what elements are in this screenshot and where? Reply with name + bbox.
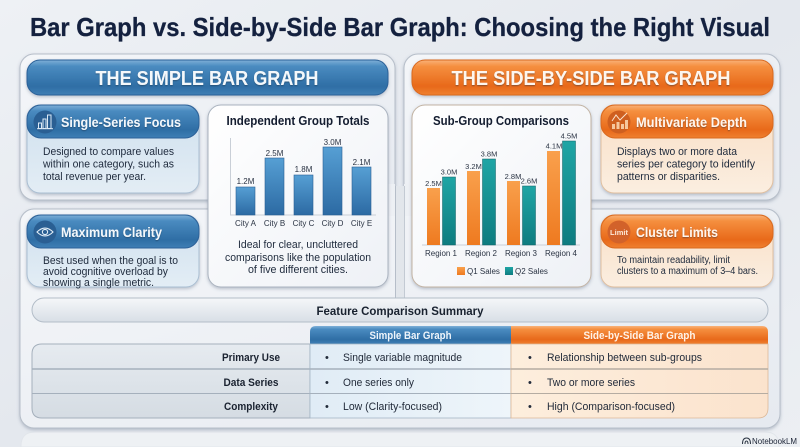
- legend: [457, 267, 548, 276]
- table row labels: Data Series: [224, 377, 278, 389]
- heading: maximum clarity: Maximum Clarity: [61, 225, 162, 240]
- table header: simple bar graph: Simple Bar Graph: [370, 330, 452, 342]
- bar chart: city populations: City C: [293, 219, 315, 228]
- table row labels: Complexity: [224, 401, 279, 413]
- card: sub-group comparisons chart: [412, 105, 591, 287]
- table row labels: Primary Use: [222, 352, 280, 364]
- text: cluster limits description: To maintain readability, limit: [617, 255, 730, 266]
- table column: simple bar graph: Single variable magnitude: [343, 352, 462, 364]
- bar chart: regional sales: 3.0M: [441, 168, 457, 176]
- icon: bar chart: [34, 110, 56, 134]
- bar chart: regional sales: Region 3: [505, 249, 538, 258]
- panel: side-by-side bar graph top: [404, 54, 780, 200]
- table row labels: [32, 344, 310, 418]
- text: cluster limits description: clusters to a maximum of 3–4 bars.: [617, 266, 758, 277]
- table header: side-by-side bar graph: [511, 326, 768, 344]
- bar chart: city populations: City A: [235, 219, 257, 228]
- text: maximum clarity description: avoid cognitive overload by: [43, 266, 168, 278]
- card: single-series focus: [27, 105, 199, 193]
- legend: Q2 Sales: [515, 267, 548, 276]
- icon: limit badge: Limit: [610, 228, 628, 237]
- heading: single-series focus: Single-Series Focus: [61, 115, 181, 130]
- bar chart: regional sales: Region 4: [545, 249, 578, 258]
- heading: independent group totals: Independent Group Totals: [226, 114, 370, 128]
- heading: sub-group comparisons: Sub-Group Comparisons: [433, 114, 569, 128]
- heading: cluster limits: Cluster Limits: [636, 225, 718, 240]
- text: multivariate description: Displays two or more data: [617, 146, 738, 158]
- table column: side-by-side bar graph: •: [528, 352, 532, 364]
- card: multivariate depth: [601, 105, 773, 193]
- bar chart: city populations: 1.2M: [237, 177, 255, 186]
- table column: side-by-side bar graph: Two or more series: [547, 377, 635, 389]
- table column: simple bar graph: •: [325, 401, 329, 413]
- heading: multivariate depth: Multivariate Depth: [636, 115, 747, 130]
- text: chart caption: Ideal for clear, uncluttered: [238, 239, 358, 251]
- heading: feature comparison summary: Feature Comparison Summary: [316, 304, 484, 318]
- gutter between columns: [385, 184, 413, 298]
- card header: multivariate depth: [601, 105, 773, 138]
- table column: side-by-side bar graph: Relationship between sub-groups: [547, 352, 702, 364]
- bar chart: regional sales: [422, 132, 580, 258]
- bar chart: regional sales: Region 2: [465, 249, 498, 258]
- table header: simple bar graph: [310, 326, 511, 344]
- table column: side-by-side bar graph: [511, 344, 768, 418]
- text: single-series description: within one category, such as: [42, 158, 174, 170]
- text: chart caption: of five different cities.: [248, 264, 348, 276]
- bar chart: city populations: City D: [322, 219, 344, 228]
- bar chart: city populations: 3.0M: [324, 138, 342, 147]
- bar chart: city populations: City B: [264, 219, 285, 228]
- bar chart: city populations: 1.8M: [295, 165, 313, 174]
- bar chart: city populations: City E: [351, 219, 372, 228]
- card header: cluster limits: [601, 215, 773, 248]
- icon: eye: [34, 220, 56, 244]
- text: multivariate description: patterns or disparities.: [617, 171, 720, 183]
- bar chart: regional sales: 4.1M: [546, 142, 562, 150]
- panel: simple bar graph top: [20, 54, 395, 200]
- banner: the simple bar graph: [27, 60, 388, 95]
- bar chart: regional sales: 4.5M: [561, 132, 577, 140]
- icon: limit badge: [608, 220, 630, 244]
- text: single-series description: total revenue per year.: [43, 171, 146, 183]
- text: maximum clarity description: showing a single metric.: [43, 277, 154, 289]
- card: maximum clarity: [27, 215, 199, 289]
- card: cluster limits: [601, 215, 773, 287]
- table header: side-by-side bar graph: Side-by-Side Bar Graph: [584, 330, 696, 342]
- table column: side-by-side bar graph: •: [528, 401, 532, 413]
- bar chart: city populations: 2.1M: [353, 158, 371, 167]
- table column: side-by-side bar graph: High (Comparison-focused): [547, 401, 675, 413]
- icon: multivariate chart: [608, 110, 630, 134]
- text: single-series description: Designed to compare values: [43, 146, 174, 158]
- table column: simple bar graph: •: [325, 352, 329, 364]
- card: independent group totals chart: [208, 105, 388, 287]
- bar chart: regional sales: 3.8M: [481, 150, 497, 158]
- bar chart: city populations: 2.5M: [266, 149, 284, 158]
- bar chart: regional sales: Region 1: [425, 249, 458, 258]
- bar chart: city populations: [230, 138, 376, 228]
- table column: side-by-side bar graph: •: [528, 377, 532, 389]
- heading: feature comparison summary: [32, 298, 768, 322]
- bar chart: regional sales: 3.2M: [465, 162, 482, 171]
- faint lower panel: [21, 432, 779, 447]
- panel: lower section: [20, 209, 780, 428]
- banner: the simple bar graph: THE SIMPLE BAR GRAPH: [96, 68, 318, 90]
- comparison table: [32, 326, 768, 418]
- text: chart caption: comparisons like the population: [225, 252, 371, 264]
- table column: simple bar graph: [310, 344, 511, 418]
- bar chart: regional sales: 2.5M: [425, 179, 442, 188]
- card header: maximum clarity: [27, 215, 199, 248]
- bar chart: regional sales: 2.6M: [521, 176, 537, 186]
- card header: single-series focus: [27, 105, 199, 138]
- bar chart: regional sales: 2.8M: [505, 172, 521, 181]
- text: multivariate description: series per category to identify: [617, 158, 755, 170]
- banner: the side-by-side bar graph: [412, 60, 773, 95]
- table column: simple bar graph: Low (Clarity-focused): [343, 401, 442, 413]
- banner: the side-by-side bar graph: THE SIDE-BY-SIDE BAR GRAPH: [452, 68, 730, 90]
- table column: simple bar graph: One series only: [343, 377, 414, 389]
- table column: simple bar graph: •: [325, 377, 329, 389]
- legend: Q1 Sales: [467, 267, 500, 276]
- footer: notebooklm mark: NotebookLM: [752, 436, 797, 446]
- text: maximum clarity description: Best used when the goal is to: [43, 255, 178, 267]
